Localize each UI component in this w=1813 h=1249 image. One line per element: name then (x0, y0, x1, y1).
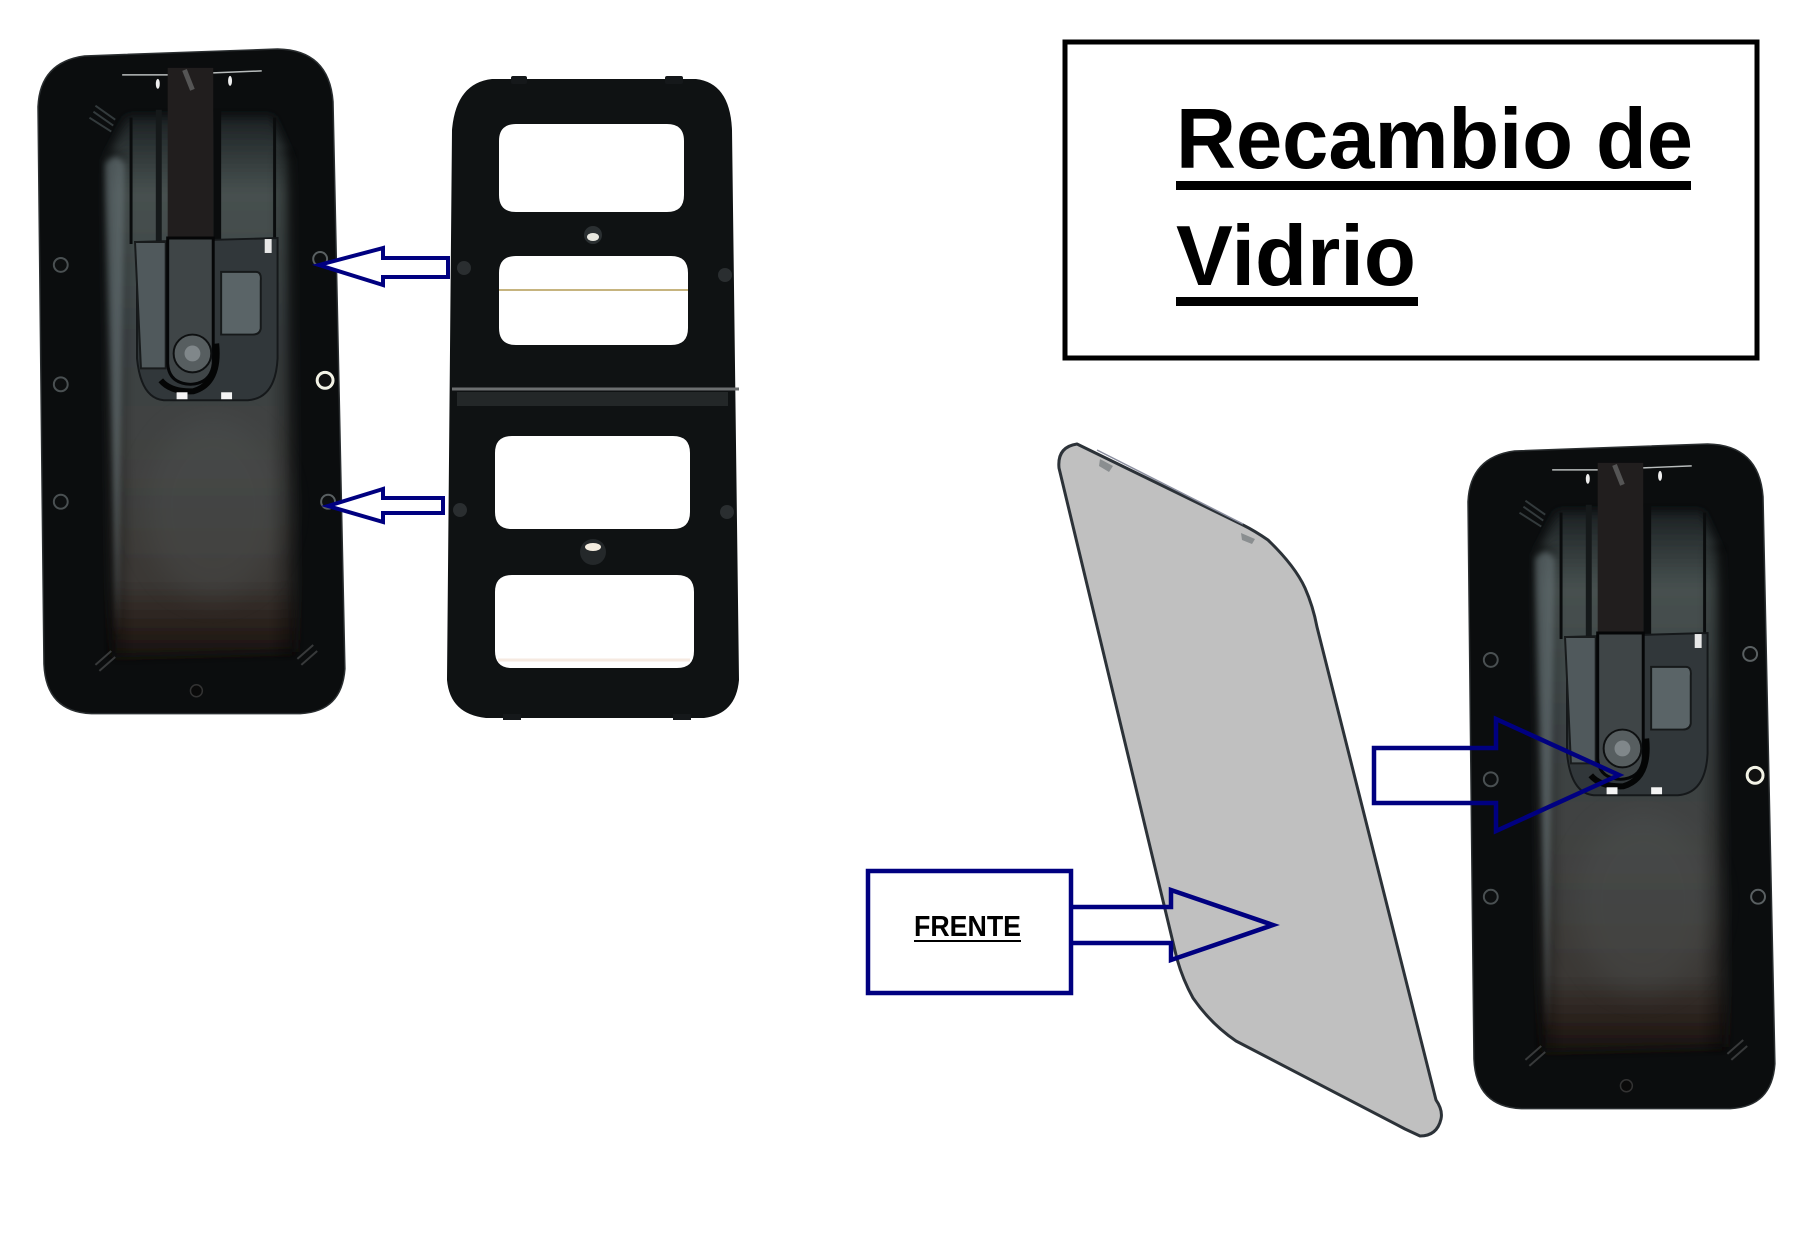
arrow: upper left (319, 248, 448, 285)
title text: Recambio de: Recambio de (1176, 92, 1693, 187)
label: FRENTE: FRENTE (914, 911, 1021, 943)
photo: mirror glass in perspective (1059, 444, 1441, 1136)
title box (1065, 42, 1757, 358)
callout: FRENTE label box (868, 871, 1071, 993)
title box: Vidrio (1176, 209, 1416, 304)
photo: mirror housing back, left (38, 49, 345, 714)
arrow: pointing at housing pivot (1374, 719, 1619, 831)
arrow: lower left (328, 489, 443, 522)
arrow: from FRENTE to glass (1071, 890, 1273, 960)
photo: split inner frame with four windows (447, 76, 739, 720)
photo: mirror housing back, right (1468, 444, 1775, 1109)
